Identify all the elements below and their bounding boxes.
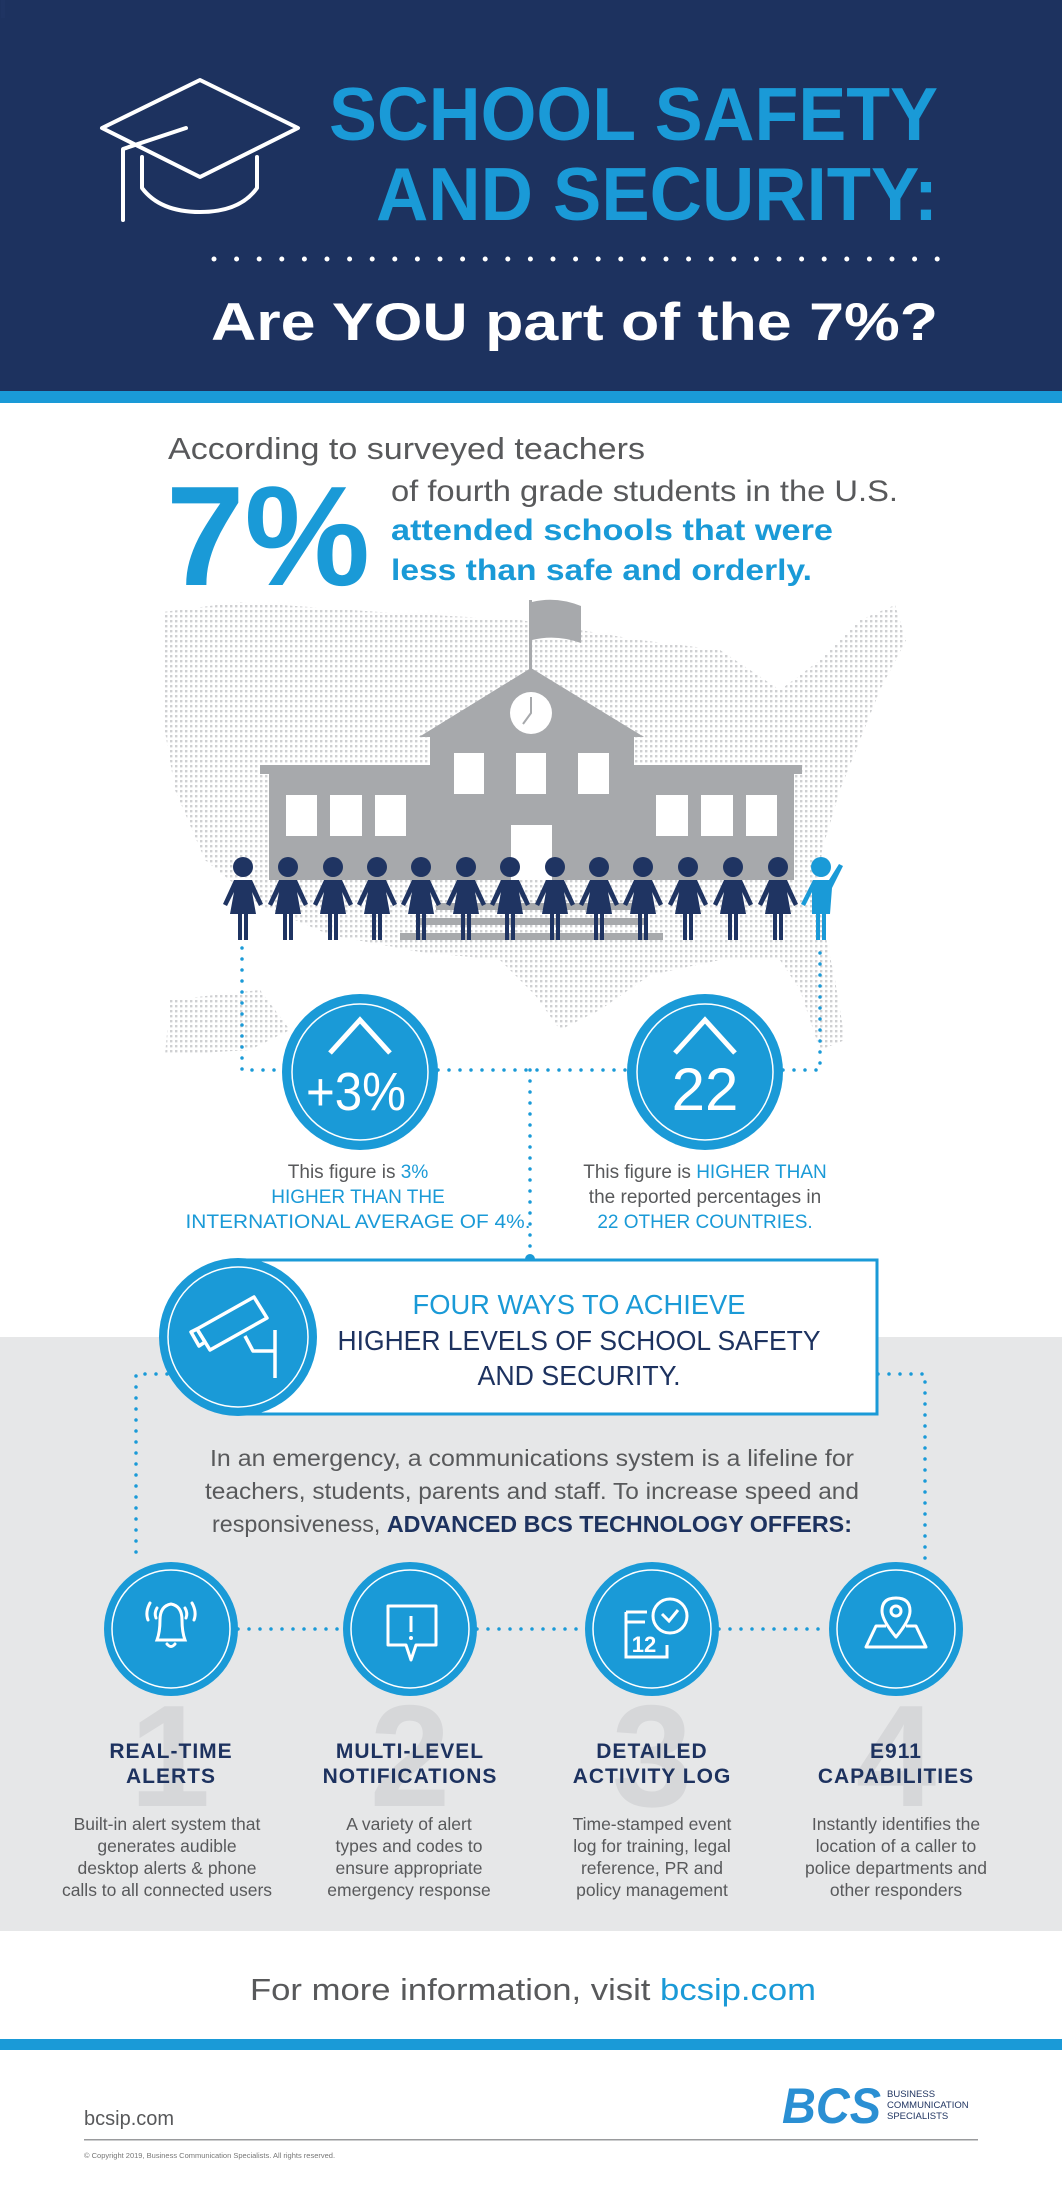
footer stripe	[0, 2039, 1062, 2050]
footer divider	[84, 2139, 978, 2140]
intro paragraph: teachers, students, parents and staff. To increase speed and	[205, 1478, 859, 1504]
icon: security camera	[159, 1258, 317, 1416]
stat text right: the reported percentages in	[589, 1187, 821, 1208]
heading box	[235, 1260, 877, 1414]
logo: BCS: COMMUNICATION	[887, 2100, 969, 2111]
gray panel background	[0, 1337, 1062, 1931]
feature 3: detailed activity log: log for training, legal	[573, 1836, 731, 1856]
feature 4: E911 capabilities: Instantly identifies the	[812, 1814, 980, 1834]
feature 1: real-time alerts: REAL-TIME	[109, 1740, 233, 1763]
feature 1: real-time alerts: calls to all connected users	[62, 1880, 272, 1900]
big stat 7%: 7%	[166, 457, 370, 616]
heading box: FOUR WAYS TO ACHIEVE	[412, 1289, 746, 1320]
feature 4: E911 capabilities: other responders	[830, 1880, 962, 1900]
logo: BCS: BCS	[782, 2078, 881, 2134]
stat circle: 22	[627, 994, 783, 1150]
logo: BCS	[782, 2078, 969, 2134]
intro paragraph	[205, 1445, 859, 1537]
big background numbers: 2	[370, 1675, 450, 1837]
title	[329, 72, 938, 236]
feature 2: multi-level notifications: MULTI-LEVEL	[336, 1740, 484, 1763]
stat text left: INTERNATIONAL AVERAGE OF 4%.	[186, 1212, 530, 1233]
stat text right	[583, 1162, 827, 1233]
icon: graduation cap	[102, 80, 298, 220]
logo: BCS: BUSINESS	[887, 2089, 935, 2100]
feature 3: detailed activity log: reference, PR and	[581, 1858, 723, 1878]
stat description	[391, 475, 898, 587]
feature 3: detailed activity log: policy management	[576, 1880, 728, 1900]
stat text left: HIGHER THAN THE	[271, 1187, 445, 1208]
feature 2: multi-level notifications: NOTIFICATIONS	[323, 1765, 497, 1788]
feature 3: detailed activity log: Time-stamped event	[573, 1814, 732, 1834]
feature 4: E911 capabilities	[805, 1562, 987, 1900]
header panel	[0, 0, 1062, 403]
feature 1: real-time alerts	[62, 1562, 272, 1900]
stat circle: +3%	[282, 994, 438, 1150]
title: SCHOOL SAFETY	[329, 72, 938, 156]
stat circle: 22: 22	[672, 1056, 738, 1123]
stat text right: This figure is HIGHER THAN	[583, 1162, 827, 1183]
feature 4: E911 capabilities: police departments and	[805, 1858, 987, 1878]
heading box: HIGHER LEVELS OF SCHOOL SAFETY	[338, 1325, 821, 1356]
dotted US map	[163, 602, 906, 1055]
title: AND SECURITY:	[376, 152, 938, 236]
stat description: attended schools that were	[391, 514, 833, 547]
intro paragraph: In an emergency, a communications system is a lifeline for	[210, 1445, 854, 1471]
feature 3: detailed activity log	[573, 1562, 732, 1900]
stat description: less than safe and orderly.	[391, 554, 812, 587]
intro text: According to surveyed teachers	[168, 431, 645, 466]
feature 1: real-time alerts: ALERTS	[126, 1765, 216, 1788]
feature 2: multi-level notifications: emergency response	[327, 1880, 491, 1900]
feature 1: real-time alerts: desktop alerts & phone	[77, 1858, 257, 1878]
footer url: bcsip.com	[84, 2108, 174, 2130]
feature 4: E911 capabilities: CAPABILITIES	[818, 1765, 974, 1788]
feature 2: multi-level notifications: A variety of alert	[346, 1814, 472, 1834]
highlighted child	[801, 857, 843, 940]
feature 3: detailed activity log: 12	[632, 1632, 656, 1657]
big background numbers	[130, 1675, 936, 1837]
feature 2: multi-level notifications: ensure appropriate	[336, 1858, 482, 1878]
big background numbers: 1	[130, 1675, 210, 1837]
dotted frame connectors	[136, 1374, 925, 1629]
call to action: For more information, visit bcsip.com	[250, 1972, 816, 2007]
stat text left	[186, 1162, 530, 1233]
stat text left: This figure is 3%	[288, 1162, 428, 1183]
feature 4: E911 capabilities: location of a caller to	[816, 1836, 976, 1856]
feature 2: multi-level notifications	[323, 1562, 497, 1900]
subtitle: Are YOU part of the 7%?	[211, 293, 938, 352]
stat circle: +3%: +3%	[306, 1062, 406, 1122]
copyright: © Copyright 2019, Business Communication Specialists. All rights reserved.	[84, 2151, 335, 2160]
feature 1: real-time alerts: generates audible	[97, 1836, 237, 1856]
big background numbers: 4	[856, 1675, 936, 1837]
stat description: of fourth grade students in the U.S.	[391, 475, 898, 508]
feature 3: detailed activity log: ACTIVITY LOG	[573, 1765, 731, 1788]
dotted divider	[214, 256, 938, 262]
feature 1: real-time alerts: Built-in alert system that	[74, 1814, 261, 1834]
feature 2: multi-level notifications: types and codes to	[336, 1836, 482, 1856]
stat text right: 22 OTHER COUNTRIES.	[597, 1212, 813, 1233]
big background numbers: 3	[612, 1675, 692, 1837]
heading box: AND SECURITY.	[478, 1360, 680, 1391]
children row	[0, 0, 798, 940]
dotted connectors	[242, 948, 820, 1255]
feature 4: E911 capabilities: E911	[870, 1740, 922, 1763]
feature 3: detailed activity log: DETAILED	[596, 1740, 708, 1763]
logo: BCS: SPECIALISTS	[887, 2111, 948, 2122]
intro paragraph: responsiveness, ADVANCED BCS TECHNOLOGY OFFERS:	[212, 1511, 852, 1537]
school building	[260, 600, 802, 940]
